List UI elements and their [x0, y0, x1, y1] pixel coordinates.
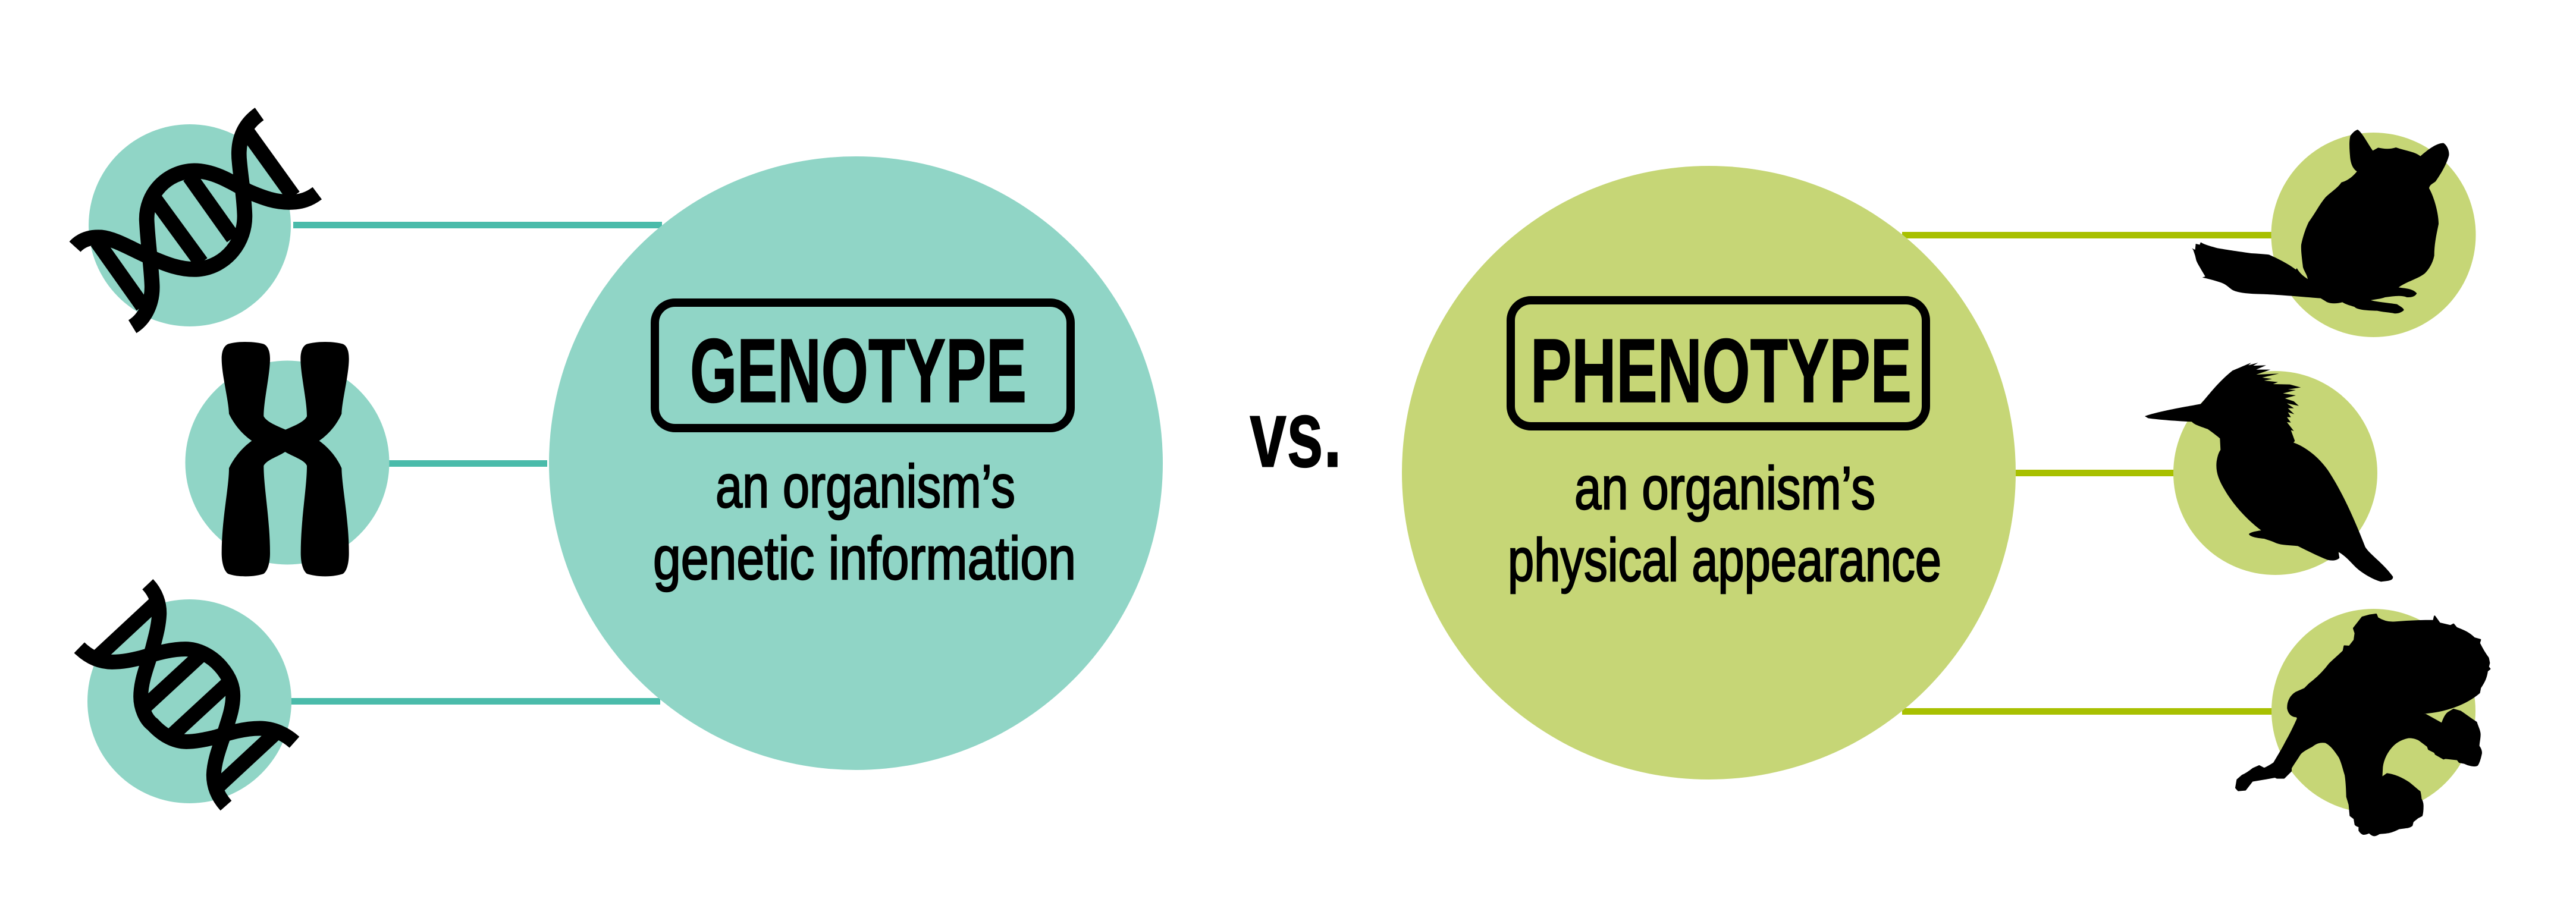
icon: octopus silhouette on green circle	[2236, 609, 2490, 835]
panel: phenotype circle	[1402, 166, 2016, 779]
connector: kingfisher to phenotype	[2016, 470, 2180, 476]
text: vs.: vs.	[1250, 381, 1342, 488]
connector: octopus to phenotype	[1902, 708, 2278, 715]
icon: chromosome on teal circle	[186, 342, 389, 576]
panel: genotype circle	[549, 156, 1163, 770]
connector: chinchilla to phenotype	[1902, 232, 2278, 238]
icon: upper DNA helix on teal circle	[75, 114, 317, 326]
connector: lower DNA to genotype	[285, 698, 660, 705]
text: phenotype definition	[1508, 454, 1941, 594]
text: phenotype definition: physical appearance	[1508, 526, 1941, 594]
heading box: GENOTYPE: GENOTYPE	[690, 320, 1027, 422]
text: genotype definition: genetic information	[653, 524, 1076, 592]
heading box: GENOTYPE	[655, 303, 1071, 428]
text: genotype definition	[653, 452, 1076, 592]
icon: chinchilla silhouette on green circle	[2192, 130, 2475, 337]
connector: DNA to genotype	[293, 222, 662, 228]
heading box: PHENOTYPE	[1511, 300, 1926, 426]
heading box: PHENOTYPE: PHENOTYPE	[1530, 320, 1912, 422]
icon: kingfisher silhouette on green circle	[2145, 363, 2393, 581]
text: genotype definition: an organism’s	[716, 452, 1015, 520]
connector: chromosome to genotype	[381, 460, 547, 467]
text: phenotype definition: an organism’s	[1574, 454, 1875, 522]
icon: lower DNA helix on teal circle	[79, 584, 294, 806]
